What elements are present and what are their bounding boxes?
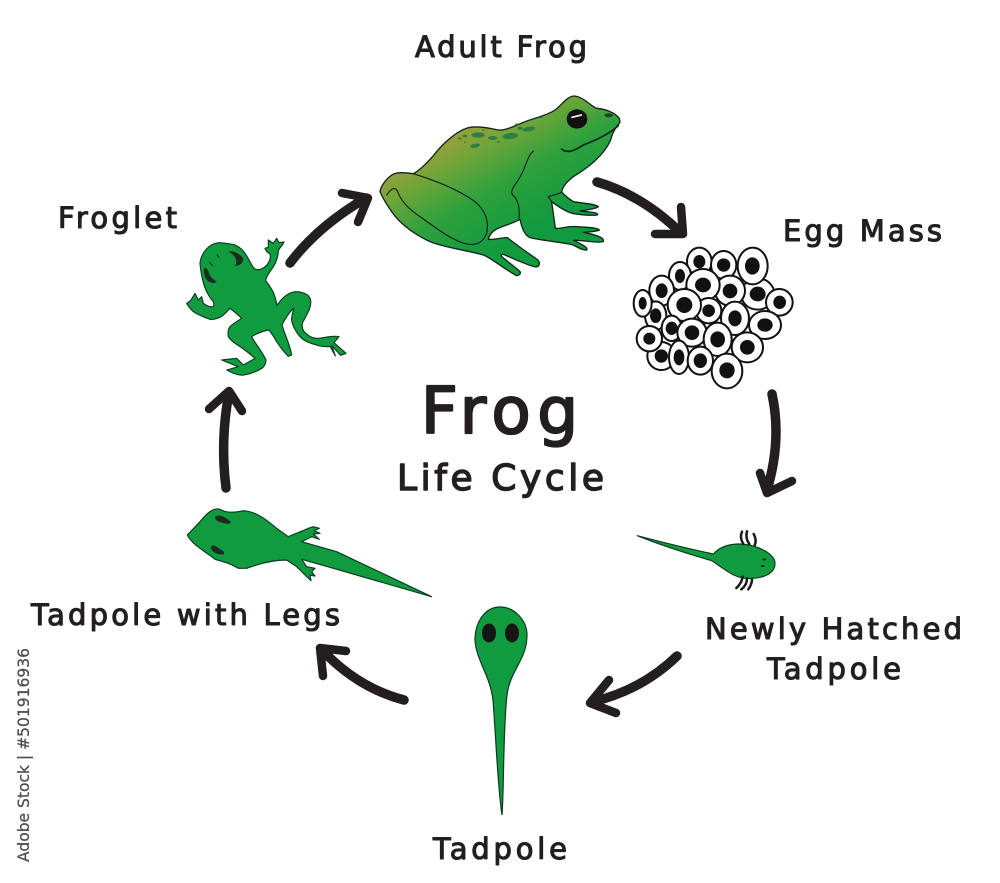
- back spots: [458, 117, 543, 149]
- icon: tadpole with legs: [187, 509, 432, 597]
- arrow: tadpole to tadpole with legs: [320, 648, 404, 700]
- label: Newly Hatched Tadpole: [705, 612, 962, 686]
- eye: [567, 109, 587, 129]
- label: Tadpole with Legs: Tadpole with Legs: [30, 598, 340, 632]
- icon: tadpole: [475, 607, 527, 815]
- icon: newly hatched tadpole: [637, 531, 775, 589]
- subtitle: Life Cycle: Life Cycle: [397, 458, 604, 499]
- arrow: egg mass to newly hatched tadpole: [760, 394, 792, 493]
- mouth: [562, 126, 618, 151]
- label: Newly Hatched Tadpole: Tadpole: [766, 652, 901, 686]
- icon: froglet: [187, 238, 346, 375]
- arrow: tadpole with legs to froglet: [209, 391, 242, 488]
- body lines: [387, 151, 562, 244]
- label: Adult Frog: Adult Frog: [415, 30, 587, 64]
- icon: egg mass: [634, 248, 793, 388]
- froglet eyes: [228, 251, 243, 266]
- label: Tadpole: Tadpole: [432, 832, 567, 866]
- title: Frog: Frog: [421, 375, 578, 449]
- label: Egg Mass: Egg Mass: [783, 214, 942, 248]
- icon: adult frog: [380, 96, 620, 276]
- arrow: newly hatched tadpole to tadpole: [590, 656, 677, 713]
- arrow: froglet to adult frog: [290, 193, 368, 263]
- eyes: [762, 558, 766, 560]
- gills: [736, 531, 756, 589]
- arrow: adult frog to egg mass: [597, 182, 683, 234]
- watermark: Adobe Stock id: Adobe Stock | #501916936: [14, 648, 33, 862]
- label: Newly Hatched Tadpole: Newly Hatched: [705, 612, 962, 646]
- label: Froglet: Froglet: [58, 201, 177, 235]
